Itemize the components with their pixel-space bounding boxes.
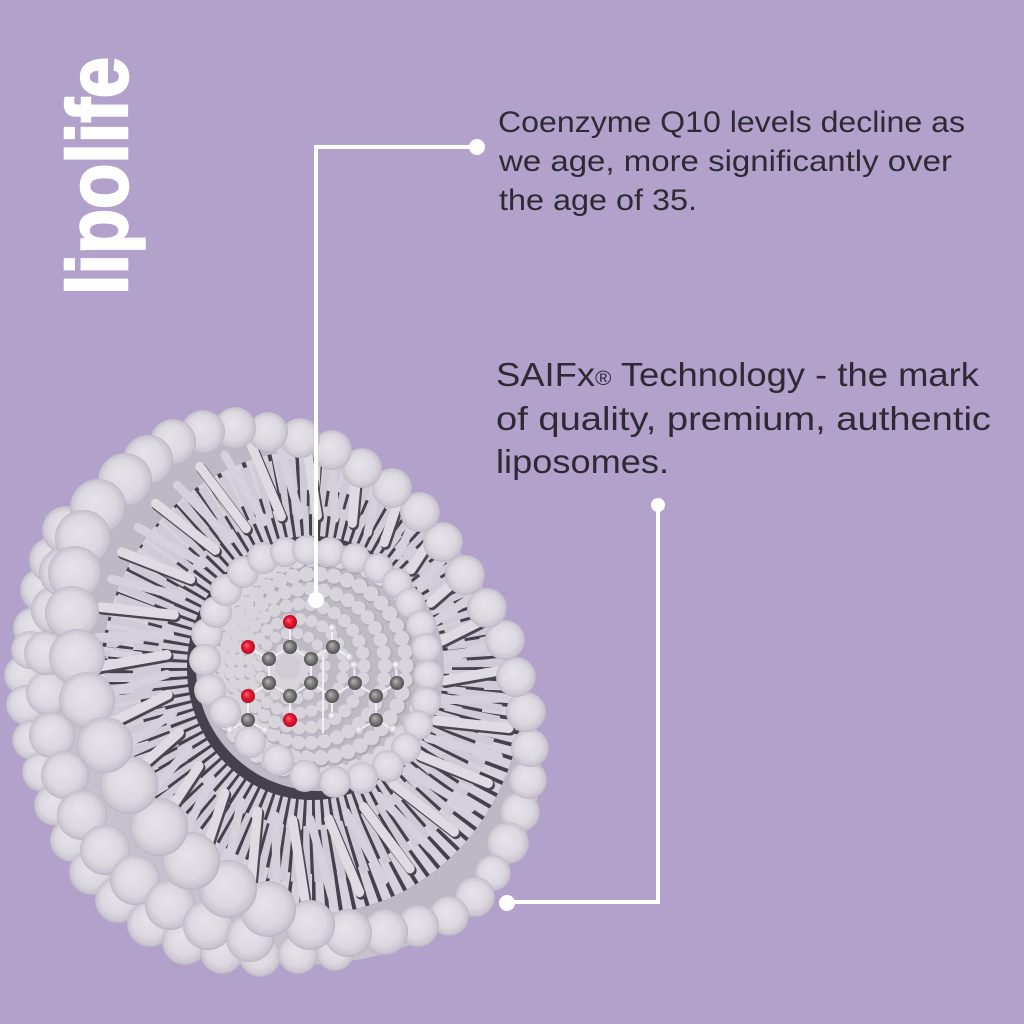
callout text: SAIFx Technology xyxy=(496,356,991,480)
callout text: SAIFx Technology: liposomes. xyxy=(496,443,669,480)
callout text: Coenzyme Q10: Coenzyme Q10 levels decline as xyxy=(498,106,965,139)
coenzyme Q10 molecule xyxy=(226,615,404,734)
phospholipid tails: dash rings xyxy=(120,470,504,894)
callout text: Coenzyme Q10: the age of 35. xyxy=(499,184,697,217)
inner rim beads xyxy=(189,535,443,798)
callout text: SAIFx Technology: ® xyxy=(595,368,612,390)
callout text: SAIFx Technology: SAIFx xyxy=(496,356,586,393)
logo: lipolife: lipolife xyxy=(51,57,146,295)
connector: Coenzyme Q10 callout to molecule core xyxy=(308,139,485,608)
liposome illustration xyxy=(4,407,549,977)
bilayer tails, clipped to the rim xyxy=(91,442,520,918)
back shell of beads xyxy=(4,506,354,977)
dark interior of the bilayer xyxy=(100,452,520,913)
callout text: SAIFx Technology: Technology - the mark xyxy=(611,356,980,393)
callout text: Coenzyme Q10 xyxy=(498,106,965,217)
hydrogen atoms xyxy=(226,624,400,734)
front rim of large beads xyxy=(45,407,549,957)
phospholipid tails: shadows xyxy=(95,437,518,902)
connector: SAIFx callout to liposome shell xyxy=(499,498,665,911)
callout text: SAIFx Technology: of quality, premium, authentic xyxy=(496,400,991,437)
molecule bonds xyxy=(230,622,397,733)
oxygen atoms xyxy=(241,615,297,727)
phospholipid tails: secondary strands xyxy=(97,439,512,897)
pale outer band behind the bead rim xyxy=(91,444,522,918)
carbon atoms xyxy=(241,640,404,727)
phospholipid tails: main strands xyxy=(94,435,516,900)
inner bowl of small beads xyxy=(196,543,444,791)
callout text: Coenzyme Q10: we age, more significantly over xyxy=(498,145,952,178)
liposome silhouette xyxy=(22,420,541,965)
